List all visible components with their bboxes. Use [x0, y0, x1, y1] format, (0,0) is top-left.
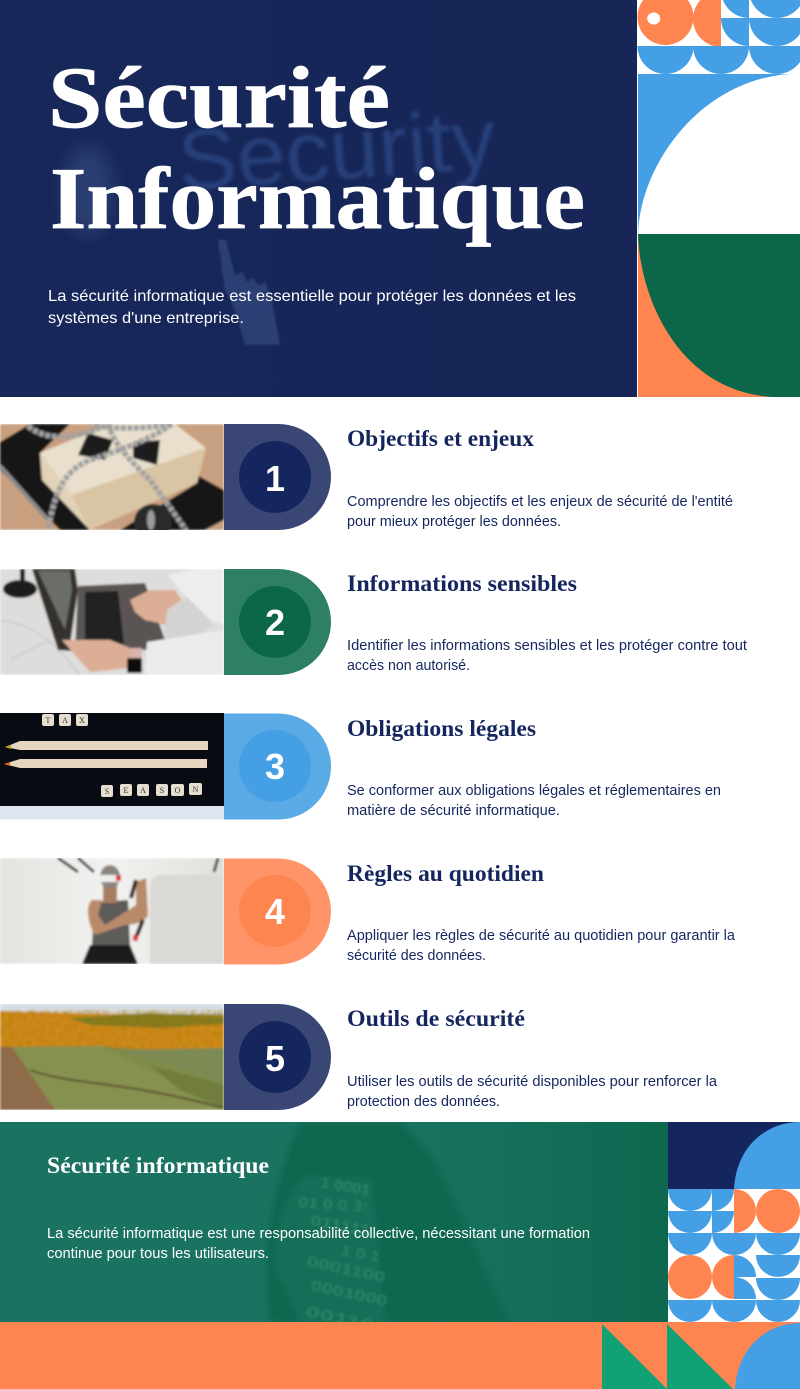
icon: orange circles [638, 0, 721, 47]
photo: pencils and letter dice: S [160, 786, 164, 795]
number badge 3: 3 [265, 746, 285, 787]
footer background photo: 01 0 0 3: [298, 1194, 369, 1216]
step 5 [0, 1004, 718, 1110]
step 1 [0, 424, 733, 540]
body 5: protection des données. [347, 1094, 500, 1110]
photo: pencils and letter dice: T [46, 716, 51, 725]
photo: pencils and letter dice: A [62, 716, 68, 725]
photo: pencils and letter dice: A [140, 786, 146, 795]
number badge 1: 1 [265, 458, 285, 499]
body 1: pour mieux protéger les données. [347, 514, 561, 530]
body 2: Identifier les informations sensibles et les protéger contre tout [347, 638, 747, 654]
step 3 [0, 713, 721, 820]
header description: systèmes d'une entreprise. [48, 310, 244, 327]
footer description: continue pour tous les utilisateurs. [47, 1246, 269, 1262]
heading 4: Règles au quotidien [347, 861, 544, 886]
step 2 [0, 569, 747, 675]
header description: La sécurité informatique est essentielle pour protéger les données et les [48, 288, 576, 305]
number badge 4: 4 [265, 891, 285, 932]
orange circles [668, 1189, 800, 1299]
heading 5: Outils de sécurité [347, 1006, 525, 1031]
number badge 3 [224, 714, 331, 820]
heading 2: Informations sensibles [347, 571, 577, 596]
header panel [0, 0, 637, 397]
blue half circles [668, 1189, 800, 1322]
photo: pencils and letter dice: N [193, 785, 199, 794]
body 2 [347, 638, 747, 674]
icon: blue quarter circle [735, 1323, 800, 1389]
photo: pencils and letter dice: E [124, 786, 129, 795]
footer background photo: 0001100 [305, 1253, 387, 1287]
photo: man with VR headset [0, 858, 224, 964]
number badge 5 [224, 1004, 331, 1110]
blue half circles [638, 0, 800, 74]
body 4 [347, 928, 736, 964]
photo: pencils and letter dice: S [105, 787, 109, 796]
footer background photo: 1 0001 [319, 1174, 371, 1200]
number badge 5: 5 [265, 1038, 285, 1079]
footer background photo: 0001000 [309, 1277, 389, 1310]
body 1 [347, 494, 733, 530]
number badge 4 [224, 858, 331, 964]
title: Sécurité [48, 50, 390, 147]
heading 3: Obligations légales [347, 716, 536, 741]
footer background photo: 1 0 1 [339, 1242, 382, 1266]
footer background photo [0, 1122, 668, 1334]
bottom orange band [0, 1322, 800, 1389]
photo: pencils and letter dice [0, 713, 224, 820]
step 4 [0, 858, 736, 964]
footer panel [0, 1122, 668, 1334]
footer background photo: 00110 [304, 1303, 376, 1334]
photo: laptop [0, 569, 224, 675]
photo: pencils and letter dice: X [79, 716, 85, 725]
title [48, 50, 585, 248]
icon: green triangles [602, 1324, 733, 1389]
title: Informatique [50, 151, 585, 248]
orange block with green arc [638, 234, 800, 397]
footer description [47, 1226, 590, 1262]
navy block with blue quarter [668, 1122, 800, 1189]
header background photo [0, 0, 637, 397]
footer description: La sécurité informatique est une responsabilité collective, nécessitant une formation [47, 1226, 590, 1242]
header background photo: Security [175, 92, 499, 209]
photo: autumn landscape [0, 1004, 224, 1110]
header description [48, 288, 576, 327]
number badge 2: 2 [265, 602, 285, 643]
body 3 [347, 783, 721, 819]
body 3: matière de sécurité informatique. [347, 803, 560, 819]
body 5: Utiliser les outils de sécurité disponibles pour renforcer la [347, 1074, 718, 1090]
body 5 [347, 1074, 718, 1110]
footer geometric pattern [668, 1122, 800, 1322]
heading 1: Objectifs et enjeux [347, 426, 534, 451]
photo: pencils and letter dice: O [175, 786, 181, 795]
body 2: accès non autorisé. [347, 658, 470, 674]
footer heading: Sécurité informatique [47, 1153, 269, 1178]
body 3: Se conformer aux obligations légales et réglementaires en [347, 783, 721, 799]
photo: chained book [0, 424, 224, 540]
body 1: Comprendre les objectifs et les enjeux de sécurité de l'entité [347, 494, 733, 510]
footer background photo: 011111 [309, 1212, 371, 1239]
number badge 2 [224, 569, 331, 675]
blue block with white arc [638, 74, 800, 234]
body 4: sécurité des données. [347, 948, 486, 964]
header geometric pattern [637, 0, 800, 397]
number badge 1 [224, 424, 331, 530]
body 4: Appliquer les règles de sécurité au quotidien pour garantir la [347, 928, 736, 944]
